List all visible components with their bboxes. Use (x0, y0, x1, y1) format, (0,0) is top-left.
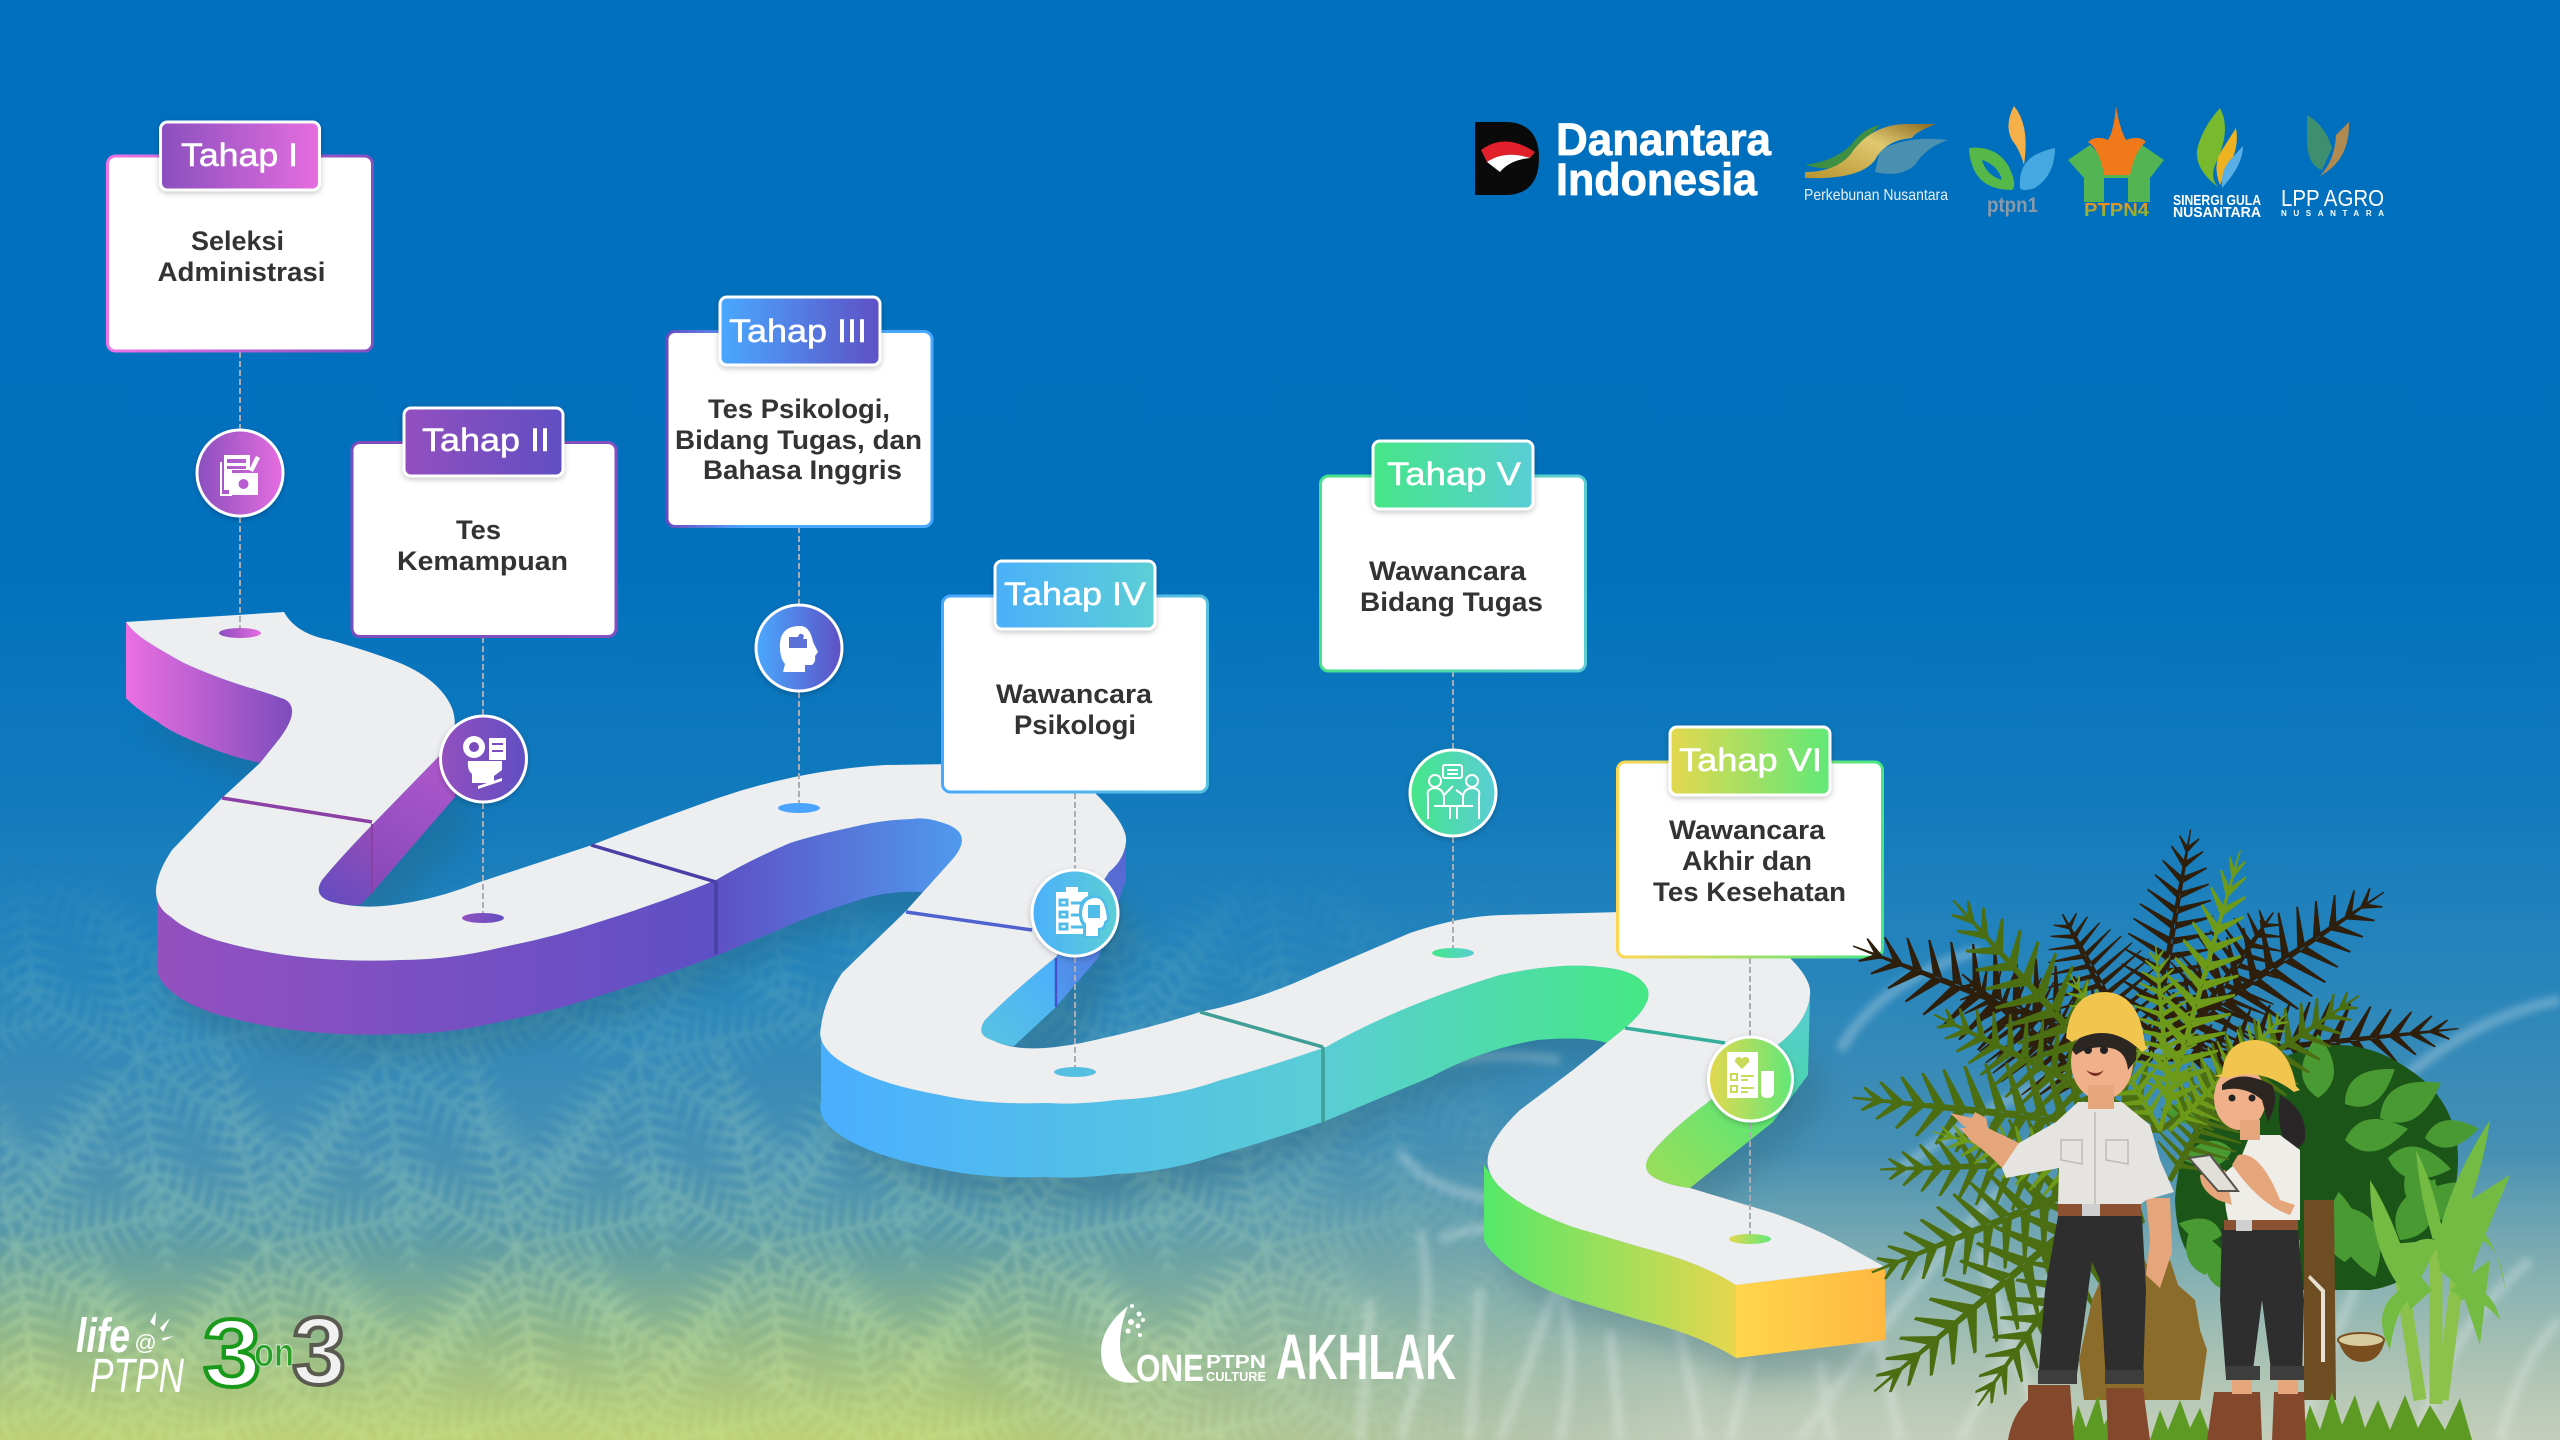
road end face (1736, 1267, 1885, 1358)
card: Tahap II (352, 408, 616, 636)
logo: PTPN4: PTPN4 (2084, 200, 2149, 220)
road wall: segment 2 inner tip (319, 825, 372, 905)
icon: head with puzzle piece (780, 626, 818, 672)
rubber tree crown (2164, 1034, 2481, 1293)
card text: Tes (456, 515, 501, 545)
card text: Psikologi (1014, 710, 1136, 740)
logo: Sinergi Gula Nusantara: NUSANTARA (2173, 204, 2261, 221)
card text: Wawancara (1369, 556, 1527, 586)
road shadow (140, 708, 1899, 1381)
logo: Perkebunan Nusantara: Perkebunan Nusantara (1804, 187, 1948, 204)
tab: Tahap V: Tahap V (1387, 456, 1522, 492)
card text: Bidang Tugas (1360, 587, 1543, 617)
tab: Tahap IV: Tahap IV (1004, 576, 1147, 612)
road wall: segment 4 (820, 1027, 1323, 1178)
logo: Sinergi Gula Nusantara: SINERGI GULA (2173, 192, 2261, 209)
card text: Bidang Tugas, dan (675, 425, 922, 455)
tab: Tahap VI: Tahap VI (1679, 742, 1822, 778)
icon: head with gear and checklist (463, 736, 506, 789)
logo: LPP Agro Nusantara (2281, 115, 2384, 218)
card text: Seleksi (191, 226, 284, 256)
road wall: segment 3 outer bend (1056, 842, 1126, 1007)
card text: Tes Kesehatan (1653, 877, 1846, 907)
grass (2070, 1392, 2472, 1440)
logo: Life at PTPN: @ (134, 1330, 156, 1355)
step 3 icon circle (756, 605, 842, 691)
logo: Life at PTPN (76, 1310, 184, 1403)
icon: medical report (1727, 1052, 1774, 1098)
tab: Tahap V (1373, 441, 1533, 509)
logo: One PTPN Culture AKHLAK (1101, 1304, 1456, 1393)
road wall: segment 5 (1323, 966, 1649, 1122)
logo: 3on3: 3 (203, 1300, 261, 1407)
road wall: segment 6 (1484, 1165, 1736, 1358)
icon: documents and gear case (221, 455, 260, 495)
tab: Tahap I (160, 122, 320, 190)
tab: Tahap II: Tahap II (422, 422, 550, 458)
illustration: plants and two plantation workers (1834, 822, 2510, 1440)
tab: Tahap IV (995, 561, 1155, 629)
road wall: segment 6 inner bend (1646, 1050, 1773, 1188)
card text: Wawancara (1669, 815, 1826, 845)
winding road (126, 612, 1885, 1358)
logo: LPP Agro Nusantara: LPP AGRO (2281, 185, 2384, 211)
brown palm fronds (1834, 822, 2463, 1134)
rubber tree trunk and cup (2304, 1200, 2385, 1400)
logo: ptpn1 (1969, 106, 2055, 217)
logo: PTPN4 (2068, 106, 2164, 220)
logo: LPP Agro Nusantara: NUSANTARA (2281, 209, 2384, 218)
logo: Life at PTPN: life (76, 1310, 130, 1363)
tab: Tahap I: Tahap I (181, 137, 298, 173)
logo: 3on3: on (254, 1331, 294, 1375)
road wall: segment 1 inner bend (372, 720, 455, 893)
road wall: segment 2 (157, 880, 716, 1035)
fruit bunch (2079, 1252, 2207, 1400)
card: Tahap III (667, 297, 932, 526)
step 1 icon circle (197, 430, 283, 516)
icon: two people at a table (1428, 765, 1479, 819)
card text: Wawancara (996, 679, 1153, 709)
step 5 icon circle (1410, 750, 1496, 836)
woman (2189, 1040, 2306, 1440)
tab: Tahap III (720, 297, 880, 365)
card text (397, 515, 568, 576)
logo: One PTPN Culture AKHLAK: AKHLAK (1276, 1321, 1456, 1393)
icon: clipboard with head (1056, 887, 1110, 938)
logo: ptpn1: ptpn1 (1987, 194, 2038, 217)
logo: One PTPN Culture AKHLAK: CULTURE (1206, 1369, 1266, 1384)
logo: One PTPN Culture AKHLAK: ONE (1136, 1348, 1204, 1390)
background palm texture (0, 850, 2560, 1440)
card: Tahap IV (942, 561, 1208, 792)
road wall: segment 5 outer bend (1773, 995, 1810, 1122)
logo: Danantara Indonesia: Indonesia (1556, 154, 1758, 205)
road dividers (222, 798, 1725, 1122)
card text: Akhir dan (1682, 846, 1812, 876)
card text (1653, 815, 1846, 907)
dashed connector lines (240, 352, 1750, 1239)
step 4 icon circle (1032, 870, 1118, 956)
road wall: segment 1 (126, 622, 292, 763)
logo: Life at PTPN: PTPN (90, 1350, 184, 1403)
logo: Danantara Indonesia (1475, 114, 1772, 205)
card: Tahap V (1320, 441, 1586, 671)
card text (1360, 556, 1543, 617)
card text (675, 394, 922, 485)
card text: Tes Psikologi, (708, 394, 890, 424)
step 2 icon circle (440, 716, 526, 802)
man (1950, 992, 2174, 1440)
road top surface (126, 612, 1885, 1285)
card text: Bahasa Inggris (703, 455, 902, 485)
logo: 3on3: 3 (292, 1298, 346, 1405)
card text: Kemampuan (397, 546, 568, 576)
tab: Tahap III: Tahap III (729, 313, 867, 349)
card: Tahap I (108, 122, 372, 351)
path markers (219, 628, 1771, 1244)
card text (158, 226, 326, 287)
road wall: segment 4 inner tip (981, 957, 1056, 1046)
green palm fronds (1843, 868, 2383, 1431)
step 6 icon circle (1708, 1037, 1792, 1121)
road wall: segment 3 (716, 818, 962, 956)
sugar cane (2370, 1120, 2510, 1404)
logo: 3on3 (203, 1298, 346, 1407)
logo: Perkebunan Nusantara (1804, 124, 1948, 204)
tab: Tahap VI (1670, 727, 1830, 795)
card text (996, 679, 1153, 740)
logo: One PTPN Culture AKHLAK: PTPN (1206, 1352, 1266, 1372)
card text: Administrasi (158, 257, 326, 287)
card: Tahap VI (1618, 727, 1882, 957)
logo: Sinergi Gula Nusantara (2173, 108, 2261, 221)
tab: Tahap II (404, 408, 563, 476)
logo: Danantara Indonesia: Danantara (1556, 114, 1772, 165)
